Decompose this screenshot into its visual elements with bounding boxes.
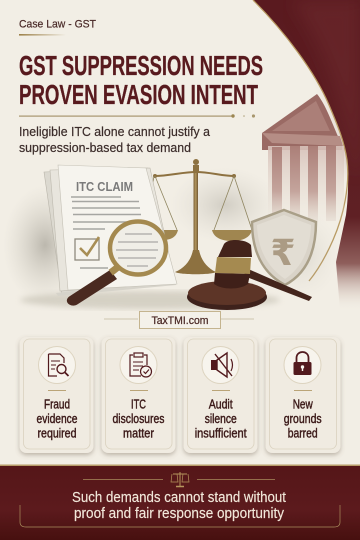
smoky backdrop <box>3 167 340 309</box>
card text: Fraud <box>44 398 70 412</box>
card text: grounds <box>284 412 322 426</box>
subtitle <box>19 124 211 155</box>
icon: padlock <box>294 352 312 375</box>
icon: clipboard check <box>130 353 152 377</box>
card text: New <box>293 398 313 412</box>
card: fraud evidence <box>20 337 94 453</box>
icon: footer scales <box>171 472 189 486</box>
card: new grounds <box>266 337 340 453</box>
maroon curtain with gold edge <box>253 0 360 310</box>
card text: disclosures <box>112 412 164 426</box>
footer message <box>72 490 286 522</box>
footer frame <box>20 505 340 527</box>
card text <box>112 398 164 440</box>
card text: required <box>38 426 77 440</box>
illustration: rupee shield <box>252 210 316 285</box>
card: audit silence <box>184 337 258 453</box>
title <box>19 50 263 110</box>
illustration: ITC claim document <box>44 165 177 296</box>
illustration: rupee shield: ₹ <box>270 233 296 274</box>
icon: document search <box>48 354 68 376</box>
accent rule <box>19 34 66 36</box>
brand badge <box>104 312 254 328</box>
subtitle: suppression-based tax demand <box>19 140 191 155</box>
illustration: magnifying glass <box>67 222 166 306</box>
icon: muted speaker <box>211 353 232 377</box>
brand badge: TaxTMI.com <box>152 315 208 327</box>
illustration: balance scales <box>150 159 252 274</box>
footer ornament lines <box>83 478 275 480</box>
label: case law: Case Law - GST <box>19 18 96 30</box>
card text: barred <box>288 426 318 440</box>
title divider <box>19 114 255 118</box>
courthouse <box>262 94 344 226</box>
illustration: ITC claim document: ITC CLAIM <box>76 180 133 194</box>
card text: ITC <box>131 398 146 412</box>
footer banner <box>0 464 360 540</box>
card text: matter <box>123 426 154 440</box>
card text: Audit <box>209 398 233 412</box>
card text: evidence <box>36 412 78 426</box>
card: ITC disclosures <box>102 337 176 453</box>
card text: silence <box>205 412 237 426</box>
card text <box>36 398 78 440</box>
footer message: Such demands cannot stand without <box>72 490 286 506</box>
subtitle: Ineligible ITC alone cannot justify a <box>19 124 211 139</box>
footer message: proof and fair response opportunity <box>74 506 285 522</box>
card text: insufficient <box>195 426 247 440</box>
card text <box>195 398 247 440</box>
card text <box>284 398 322 440</box>
illustration: gavel <box>187 240 312 310</box>
